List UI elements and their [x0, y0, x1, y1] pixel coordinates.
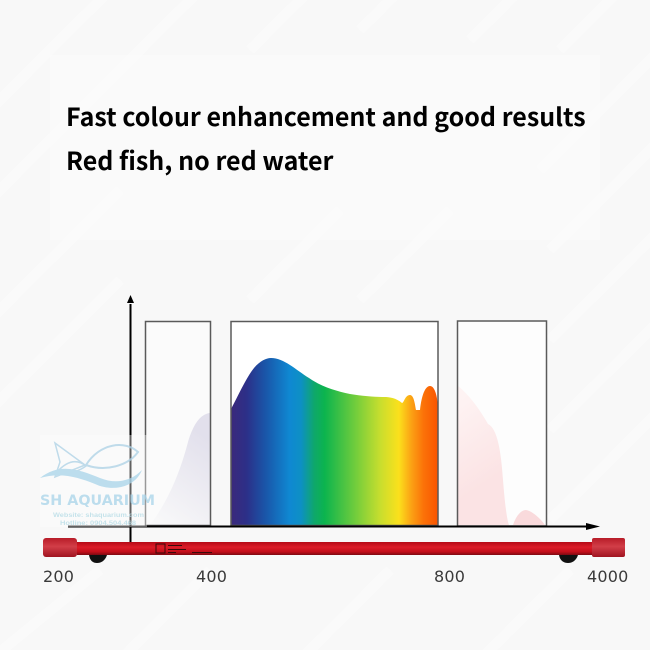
icon: wave	[40, 469, 142, 488]
watermark: SH Aquarium logo	[40, 435, 155, 527]
axis labels: 200	[43, 567, 74, 586]
left box	[146, 322, 210, 526]
watermark: SH Aquarium logo: Hotline: 0904.504.468	[60, 520, 136, 527]
watermark: SH Aquarium logo: Website: shaquarium.com	[53, 512, 144, 519]
lamp: red light bar	[43, 538, 625, 563]
axis labels	[43, 567, 629, 586]
title: Fast colour enhancement and good results	[66, 98, 586, 134]
middle box with rainbow spectrum	[231, 322, 438, 526]
title: Red fish, no red water	[66, 142, 333, 178]
right box	[458, 321, 546, 526]
icon: fish	[55, 443, 138, 477]
y axis arrow	[127, 295, 134, 543]
x axis arrow	[68, 523, 600, 530]
axis labels: 400	[196, 567, 227, 586]
bar label print	[156, 544, 212, 553]
suction cup left	[89, 552, 107, 563]
title	[66, 98, 586, 178]
chart: spectrum	[68, 295, 600, 543]
suction cup right	[559, 552, 578, 563]
axis labels: 4000	[587, 567, 629, 586]
axis labels: 800	[434, 567, 465, 586]
watermark: SH Aquarium logo: SH AQUARIUM	[40, 493, 155, 509]
